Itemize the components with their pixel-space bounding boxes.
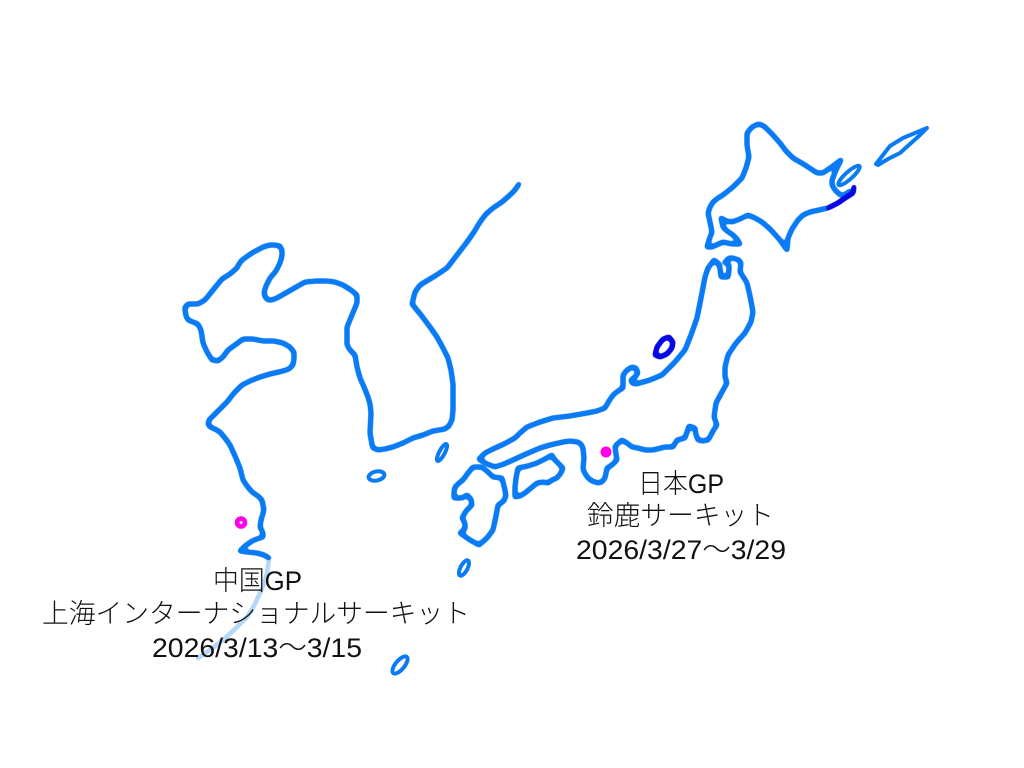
location marker: Suzuka	[600, 446, 612, 458]
coastline: pale southern China	[198, 558, 269, 658]
island: Tanegashima	[457, 559, 471, 577]
label: Japan GP: 日本GP	[638, 469, 724, 499]
island: Etorofu	[876, 128, 927, 165]
location marker: Shanghai	[237, 519, 245, 526]
coastline: Hokkaido	[707, 124, 850, 250]
label: Japan GP: 鈴鹿サーキット	[587, 501, 774, 531]
label: China GP: 中国GP	[213, 566, 302, 596]
coastline: Shikoku	[515, 455, 563, 497]
coastline: Honshu	[479, 258, 753, 483]
island: Amami	[390, 654, 410, 676]
island: Tsushima	[435, 443, 449, 462]
label: China GP: 2026/3/13〜3/15	[152, 633, 362, 663]
label: Japan GP	[576, 469, 786, 565]
label: China GP	[42, 566, 470, 663]
coastline: Kyushu	[454, 467, 506, 545]
island: Kunashiri	[836, 163, 862, 188]
island: Sado	[655, 337, 673, 357]
island: Jeju	[368, 470, 385, 482]
coastline: China and Korea	[185, 184, 519, 558]
label: China GP: 上海インターナショナルサーキット	[42, 599, 470, 629]
label: Japan GP: 2026/3/27〜3/29	[576, 535, 786, 565]
Nemuro peninsula highlight	[828, 187, 854, 208]
